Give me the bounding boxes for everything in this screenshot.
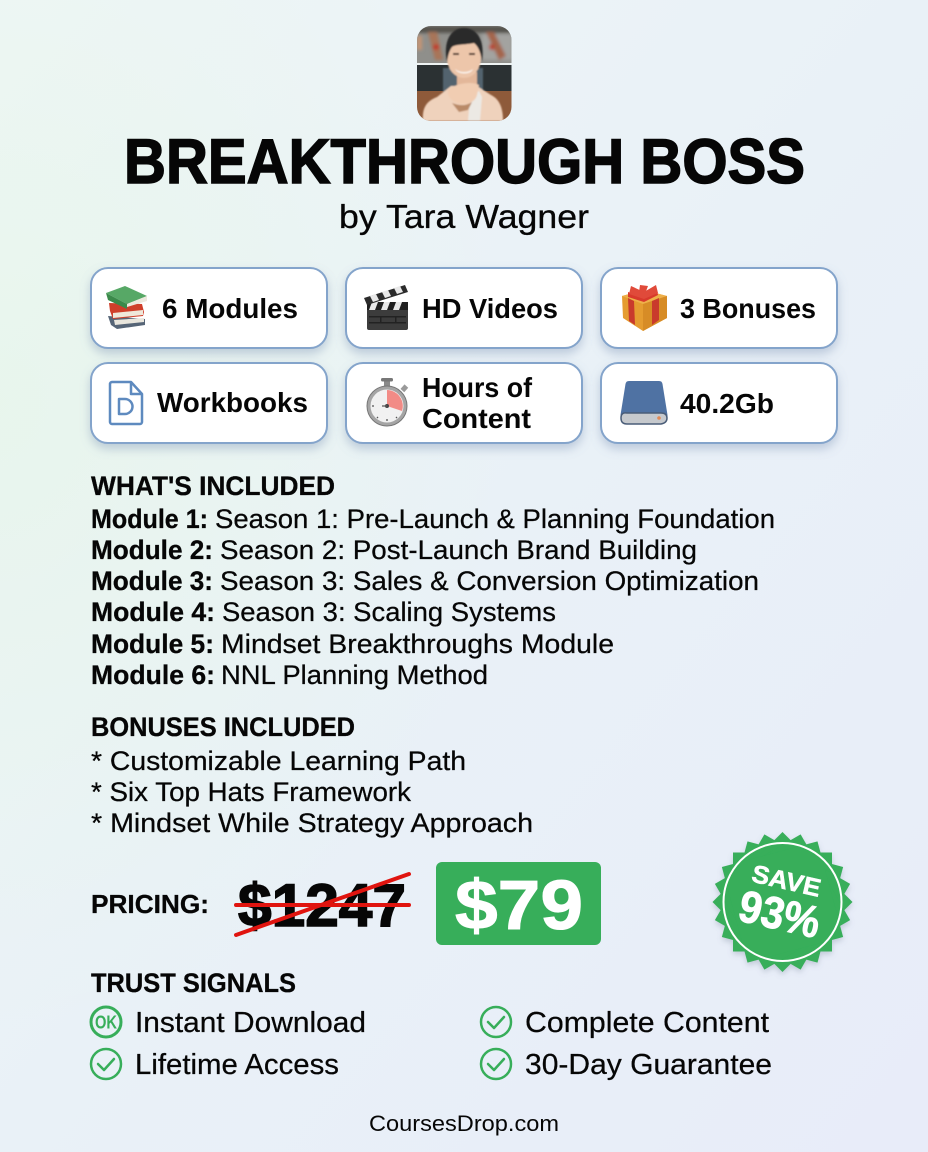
subtitle: by Tara Wagner: [339, 198, 589, 235]
module list: Season 3: Sales & Conversion Optimization: [220, 566, 759, 596]
module list: Module 1:: [91, 504, 208, 534]
module list: Module 3:: [91, 566, 213, 596]
save 93% badge: SAVE: [749, 860, 824, 903]
new price box: $79: [455, 866, 583, 944]
feature card: 40.2Gb: [601, 363, 837, 443]
module list: Module 6:: [91, 660, 215, 690]
feature card: Hours of Content: [346, 363, 582, 443]
icon: gift box: [622, 285, 667, 331]
label: [422, 372, 533, 434]
module list: [91, 504, 775, 690]
feature card: 6 Modules: [91, 268, 327, 348]
title: BREAKTHROUGH BOSS: [124, 127, 805, 197]
footer: CoursesDrop.com: [369, 1111, 559, 1136]
trust item: complete content: Complete Content: [525, 1007, 769, 1039]
icon: clapperboard: [364, 285, 408, 330]
module list: Module 2:: [91, 535, 213, 565]
bonus list: * Mindset While Strategy Approach: [91, 808, 533, 838]
trust item: instant download: Instant Download: [135, 1007, 366, 1039]
label: 40.2Gb: [680, 388, 774, 419]
icon: stopwatch: [367, 378, 408, 426]
module list: NNL Planning Method: [221, 660, 488, 690]
bonus list: [91, 746, 533, 838]
save 93% badge: 93%: [734, 880, 825, 948]
section: trust signals: [91, 968, 772, 1081]
label: Content: [422, 403, 531, 434]
bonus list: * Customizable Learning Path: [91, 746, 466, 776]
module list: Module 5:: [91, 629, 214, 659]
label: 3 Bonuses: [680, 293, 816, 324]
old price struck through: $1247: [238, 872, 406, 939]
label: HD Videos: [422, 293, 558, 324]
new price box: [436, 862, 601, 945]
section: what's included: [91, 471, 775, 690]
trust item: lifetime access: Lifetime Access: [135, 1049, 339, 1081]
trust item: instant download: OK: [95, 1012, 117, 1032]
module list: Season 2: Post-Launch Brand Building: [220, 535, 697, 565]
module list: Season 3: Scaling Systems: [222, 597, 556, 627]
feature card: 3 Bonuses: [601, 268, 837, 348]
icon: hard drive: [620, 381, 668, 424]
feature card: HD Videos: [346, 268, 582, 348]
icon: document: [110, 382, 142, 424]
trust item: 30-day guarantee: 30-Day Guarantee: [525, 1049, 772, 1081]
pricing row: [91, 862, 601, 945]
portrait photo of Tara Wagner: [417, 26, 512, 121]
bonus list: * Six Top Hats Framework: [91, 777, 411, 807]
heading: WHAT'S INCLUDED: [91, 471, 335, 501]
pricing label: PRICING:: [91, 889, 209, 919]
label: Workbooks: [157, 387, 308, 418]
label: Hours of: [422, 372, 533, 403]
label: 6 Modules: [162, 293, 298, 324]
module list: Mindset Breakthroughs Module: [221, 629, 614, 659]
heading: BONUSES INCLUDED: [91, 712, 355, 742]
feature card: Workbooks: [91, 363, 327, 443]
module list: Season 1: Pre-Launch & Planning Foundation: [215, 504, 775, 534]
module list: Module 4:: [91, 597, 215, 627]
icon: stack of books: [106, 286, 147, 329]
section: bonuses included: [91, 712, 533, 838]
heading: TRUST SIGNALS: [91, 968, 296, 998]
save 93% badge: [712, 832, 853, 972]
